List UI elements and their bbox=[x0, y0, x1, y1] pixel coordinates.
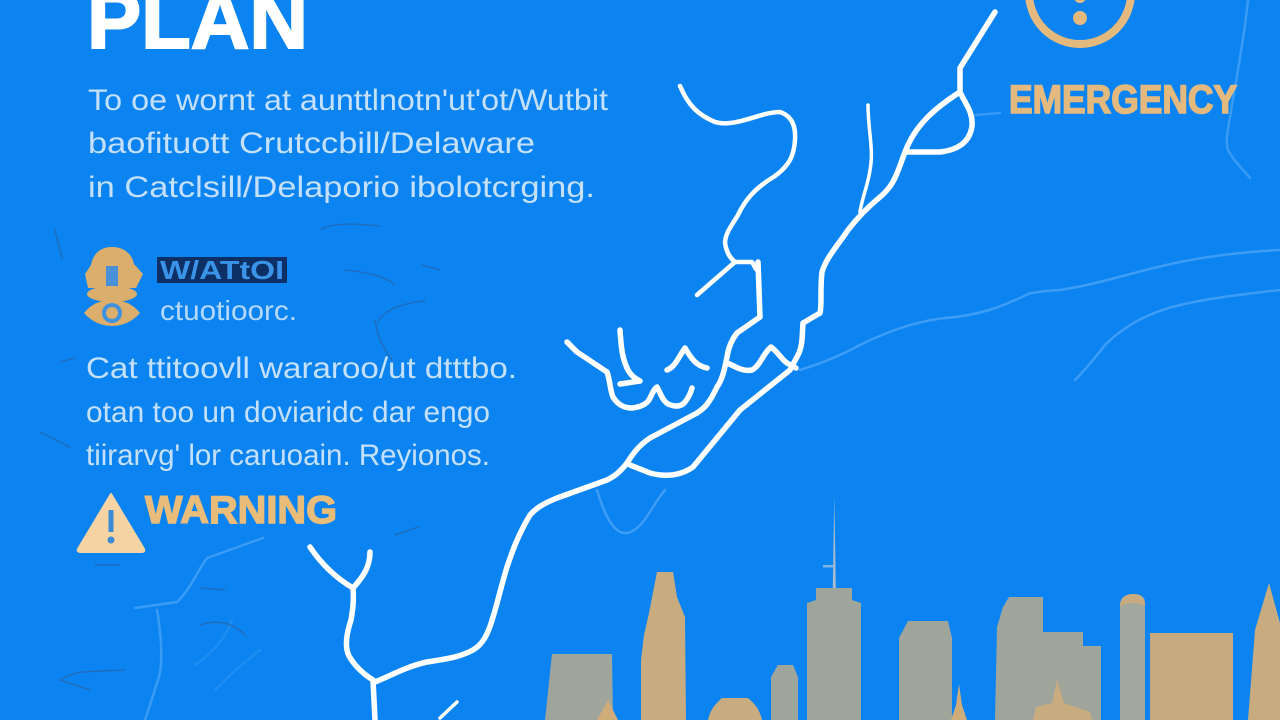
warning label: WARNING bbox=[145, 489, 337, 532]
second text block: otan too un doviaridc dar engo bbox=[86, 396, 490, 429]
building: grey spire tower bbox=[807, 495, 861, 720]
river: lower fork bbox=[310, 547, 375, 720]
building: tan block bbox=[1150, 633, 1233, 720]
intro text block bbox=[88, 84, 609, 204]
second text block: tiirarvg' lor caruoain. Reyionos. bbox=[86, 439, 490, 472]
river: upper main channel bbox=[630, 12, 995, 475]
icon: emergency alert circle bbox=[1029, 0, 1131, 44]
building: tan steeple bbox=[1033, 680, 1092, 720]
icon: warning triangle bbox=[78, 494, 144, 552]
building: tan small spire bbox=[597, 700, 618, 720]
intro text block: baofituott Crutccbill/Delaware bbox=[88, 127, 535, 160]
building: tan dome bbox=[708, 698, 762, 720]
building: tan bottle tower bbox=[641, 572, 686, 720]
building: grey block centre bbox=[899, 621, 952, 720]
building: tan needle bbox=[951, 684, 967, 720]
icon: bell and eye bbox=[84, 247, 143, 326]
river: small stub bbox=[440, 702, 457, 718]
building: grey narrow bbox=[771, 665, 798, 720]
intro text block: in Catclsill/Delaporio ibolotcrging. bbox=[88, 171, 595, 204]
river: upper left branch bbox=[680, 86, 795, 295]
river map bbox=[310, 12, 995, 720]
river: delta squiggles bbox=[567, 330, 796, 408]
intro text block: To oe wornt at aunttlnotn'ut'ot/Wutbit bbox=[88, 84, 609, 117]
emergency label: EMERGENCY bbox=[1009, 78, 1237, 122]
river: thin branch bbox=[860, 105, 871, 212]
city skyline bbox=[545, 495, 1280, 720]
watch description: ctuotioorc. bbox=[160, 295, 297, 326]
building: tan pointed tower bbox=[1248, 583, 1280, 720]
watch label: W/ATtOI bbox=[160, 255, 284, 285]
building: grey slim tower bbox=[1120, 594, 1145, 720]
second text block: Cat ttitoovll wararoo/ut dtttbo. bbox=[86, 352, 517, 385]
building: grey block left bbox=[545, 654, 613, 720]
dark map scribbles bbox=[40, 224, 440, 690]
river: central channel bbox=[375, 262, 760, 682]
building: grey cluster bbox=[995, 597, 1101, 720]
second text block bbox=[86, 352, 517, 472]
building: tan cap bbox=[1120, 594, 1145, 606]
